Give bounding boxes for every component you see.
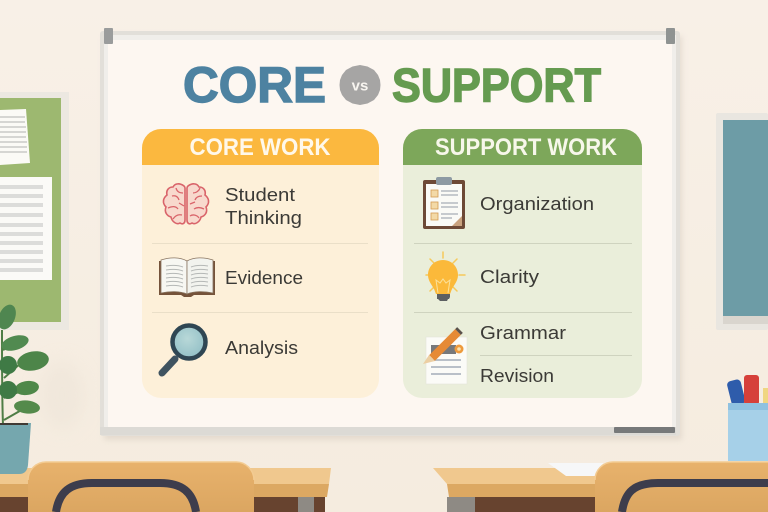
title — [183, 57, 601, 113]
text: analysis: Analysis — [225, 338, 298, 358]
plant wall shadow — [40, 361, 84, 429]
icon: clipboard checklist — [423, 177, 465, 229]
text: student thinking: Student — [225, 185, 295, 205]
pencil cup — [726, 375, 768, 461]
left bulletin board — [0, 92, 69, 330]
whiteboard — [100, 28, 680, 436]
icon: magnifying glass — [162, 326, 206, 373]
text: organization: Organization — [480, 194, 594, 214]
text: clarity: Clarity — [480, 267, 539, 287]
right wall board — [716, 113, 768, 330]
icon: open book — [159, 258, 215, 297]
chair handle right — [622, 483, 768, 512]
chair handle left — [56, 483, 196, 512]
core header — [142, 129, 379, 165]
text: student thinking: Thinking — [225, 208, 302, 228]
support heading: SUPPORT WORK — [435, 134, 618, 161]
paper stack on desk — [548, 463, 603, 476]
text: revision: Revision — [480, 366, 554, 386]
core heading: CORE WORK — [190, 134, 331, 161]
plant pot — [0, 423, 31, 474]
left chair — [28, 462, 254, 512]
whiteboard shadow — [104, 36, 682, 440]
note: lower pinned paper — [0, 177, 52, 280]
plant — [0, 302, 50, 474]
icon: light bulb — [426, 252, 465, 301]
right desk — [433, 468, 768, 512]
text: student thinking — [225, 185, 302, 228]
text: evidence: Evidence — [225, 268, 303, 288]
whiteboard clip left — [104, 28, 113, 44]
whiteboard clip right — [666, 28, 675, 44]
panel: core work — [142, 129, 379, 398]
title: SUPPORT: SUPPORT — [392, 58, 601, 112]
icon: pencil on paper — [423, 330, 467, 384]
text: grammar: Grammar — [480, 323, 566, 343]
vs badge: vs — [352, 78, 368, 94]
marker tray — [100, 427, 676, 435]
note: upper pinned paper — [0, 109, 30, 165]
vs badge — [340, 65, 380, 105]
title: CORE: CORE — [183, 57, 326, 113]
icon: brain — [163, 184, 209, 224]
panel: support work — [403, 129, 642, 398]
left desk — [0, 468, 331, 512]
right chair — [595, 462, 768, 512]
support header — [403, 129, 642, 165]
